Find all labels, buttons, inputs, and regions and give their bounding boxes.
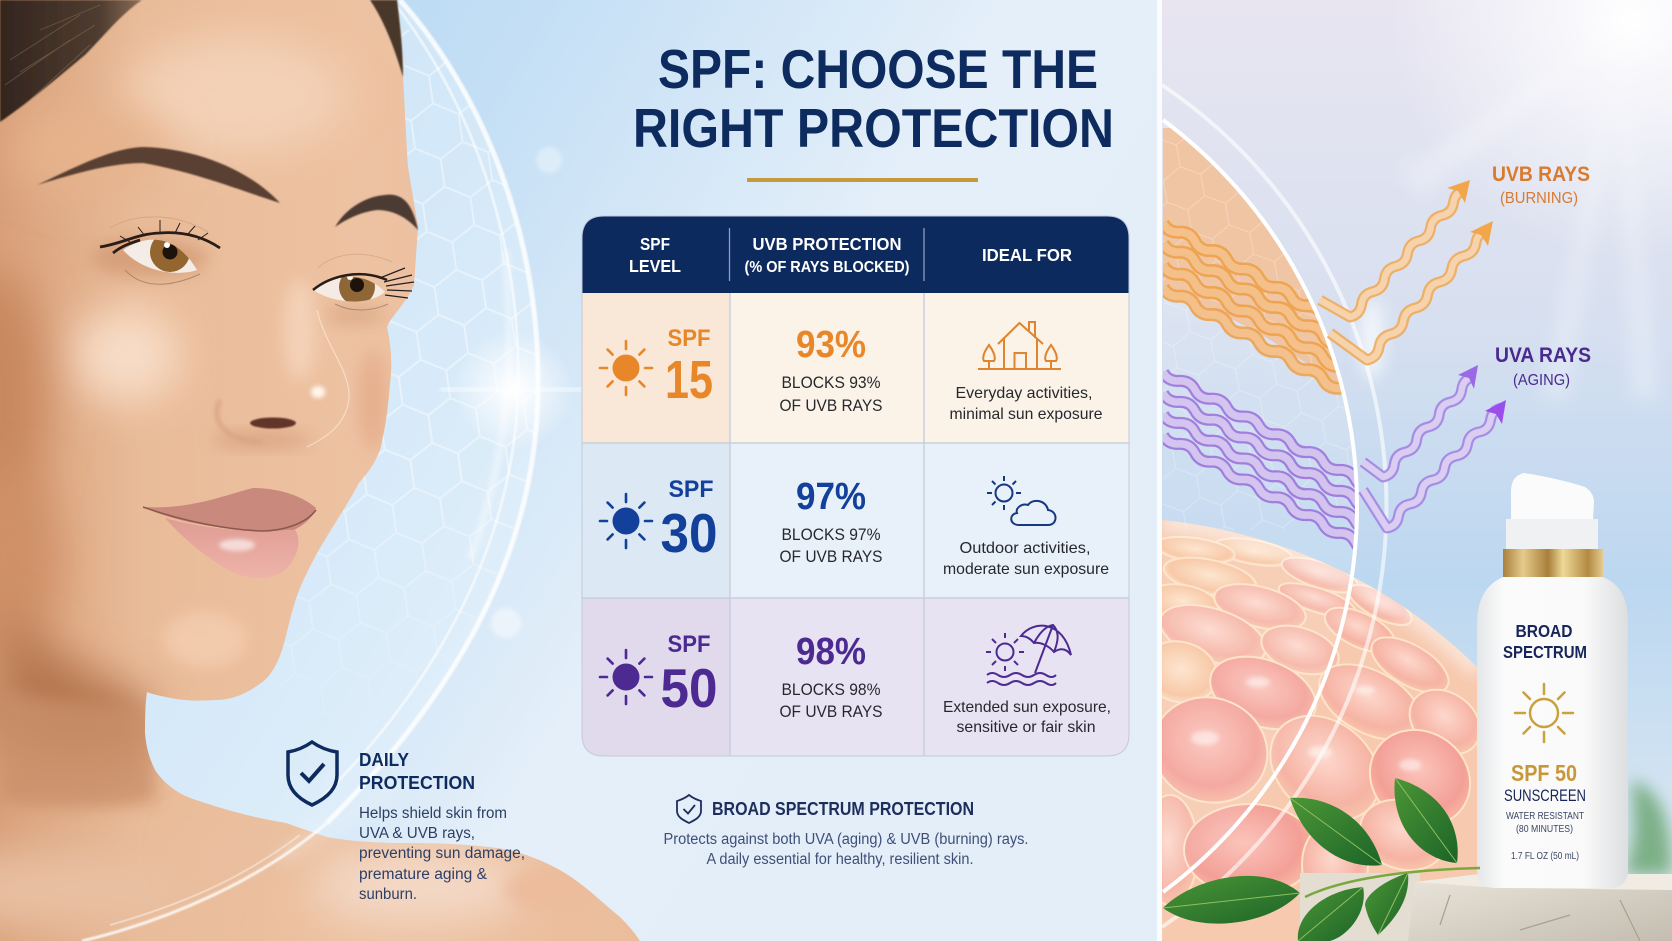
bottle label: water resistant: 1.7 FL OZ (50 mL) (1511, 850, 1579, 862)
icon: orange sun (600, 341, 652, 395)
text: blocks 97 percent: OF UVB RAYS (780, 547, 882, 566)
heading: broad spectrum protection: BROAD SPECTRUM PROTECTION (712, 799, 974, 819)
eyebrow left (37, 147, 280, 203)
sun glare (1440, 0, 1672, 395)
skin shading (0, 35, 595, 930)
eye right (313, 254, 414, 310)
bottle label: broad spectrum: BROAD (1516, 621, 1572, 641)
row: SPF 30 (600, 476, 1109, 578)
text: blocks 97 percent: BLOCKS 97% (782, 525, 880, 544)
table header: IDEAL FOR (982, 245, 1072, 265)
arrows: UVB rays reflected (1320, 180, 1493, 360)
eyebrow right (335, 195, 418, 230)
SPF 50 label: SPF (668, 631, 710, 658)
icon: beach umbrella, sun and waves (986, 625, 1071, 685)
heading: daily protection: PROTECTION (359, 772, 475, 793)
text: extended sun exposure: sensitive or fair skin (956, 719, 1096, 736)
SPF comparison table (582, 216, 1129, 756)
title (633, 38, 1114, 159)
row: SPF 50 (600, 625, 1111, 736)
panel: left and center background (0, 0, 1157, 941)
text: outdoor activities: Outdoor activities, (960, 540, 1090, 557)
label: UVA rays: (AGING) (1513, 372, 1570, 389)
text: extended sun exposure (943, 699, 1111, 736)
text: everyday activities: Everyday activities, (956, 385, 1092, 402)
table header: (% OF RAYS BLOCKED) (744, 259, 910, 276)
bottle neck (1506, 519, 1598, 549)
text: blocks 98 percent: BLOCKS 98% (782, 680, 880, 699)
UVB waves entering skin (1163, 220, 1342, 395)
SPF 30 label (660, 476, 718, 564)
marble pedestal (1300, 873, 1672, 941)
title: RIGHT PROTECTION (633, 97, 1114, 159)
bottle label: water resistant (1506, 810, 1584, 862)
text: blocks 98 percent: OF UVB RAYS (780, 702, 882, 721)
hair (0, 0, 403, 122)
footer: broad spectrum protection (664, 795, 1028, 868)
text: daily protection description: premature aging & (359, 866, 488, 883)
text: broad spectrum description: A daily essential for healthy, resilient skin. (706, 851, 974, 868)
bottle label: SPF 50: SPF 50 (1511, 760, 1577, 786)
table header (629, 234, 1072, 276)
bottle label: water resistant: WATER RESISTANT (1506, 810, 1584, 822)
panel: UV rays and sunscreen scene (1136, 0, 1672, 941)
text: extended sun exposure: Extended sun exposure, (943, 699, 1111, 716)
sunscreen bottle (1477, 473, 1628, 888)
label: UVB rays: UVB RAYS (1492, 163, 1590, 186)
icon: shield with check (288, 742, 337, 805)
label: UVB rays: (BURNING) (1500, 190, 1578, 207)
text: daily protection description: Helps shield skin from (359, 805, 507, 822)
text: everyday activities (950, 385, 1103, 423)
text: blocks 98 percent (780, 680, 882, 721)
nose modelling (284, 280, 316, 380)
bottle label: sunscreen: SUNSCREEN (1504, 787, 1586, 805)
UVA waves entering skin (1163, 372, 1371, 551)
table header: SPF (640, 234, 670, 254)
text: outdoor activities: moderate sun exposure (943, 561, 1109, 578)
shield arc over shoulder (81, 822, 330, 941)
arrows: UVA rays reflected (1363, 365, 1506, 528)
pump head (1511, 473, 1594, 519)
text: blocks 93 percent: BLOCKS 93% (782, 373, 880, 392)
SPF 30 label: SPF (668, 476, 714, 503)
table header: UVB PROTECTION (752, 234, 902, 254)
text: daily protection description: sunburn. (359, 886, 417, 903)
98 percent: 98% (796, 631, 866, 673)
SPF 15 label: 15 (665, 350, 713, 410)
heading: daily protection: DAILY (359, 749, 410, 770)
SPF 50 label (660, 631, 718, 719)
face and shoulders skin (0, 0, 640, 941)
blurred background leaves (1628, 774, 1672, 874)
SPF 30 label: 30 (660, 502, 718, 564)
green leaves (1163, 778, 1480, 941)
protective shield bubble (145, 0, 582, 824)
text: daily protection description: UVA & UVB rays, (359, 825, 475, 842)
SPF 50 label: 50 (660, 657, 718, 719)
row: SPF 15 (600, 322, 1103, 423)
93 percent: 93% (796, 324, 866, 366)
panel: woman's face with hexagon shield (0, 0, 640, 941)
nose (217, 310, 349, 447)
heading: daily protection (360, 753, 474, 789)
icon: purple sun (600, 650, 652, 704)
eye left (100, 217, 220, 284)
callout: daily protection (288, 742, 525, 903)
icon: bottle sun (1515, 684, 1573, 742)
bottle body (1477, 577, 1628, 888)
text: blocks 93 percent: OF UVB RAYS (780, 396, 882, 415)
text: daily protection description (359, 805, 525, 903)
label: UVB rays (1493, 166, 1590, 206)
title gold underline (747, 178, 978, 182)
text: broad spectrum description (664, 831, 1028, 868)
text: outdoor activities (943, 540, 1109, 578)
shield arcs (1162, 85, 1386, 927)
text: everyday activities: minimal sun exposure (950, 406, 1103, 423)
text: blocks 97 percent (780, 525, 882, 566)
bottle label: water resistant: (80 MINUTES) (1516, 823, 1573, 835)
label: UVA rays (1496, 348, 1590, 388)
text: daily protection description: preventing sun damage, (359, 845, 525, 862)
sky background (1162, 0, 1672, 941)
icon: house and trees (978, 322, 1061, 369)
skin layer inside shield arc (1162, 110, 1362, 892)
skin cells dome (1162, 520, 1478, 941)
text: broad spectrum description: Protects against both UVA (aging) & UVB (burning) rays. (664, 831, 1028, 848)
bottle label: broad spectrum (1504, 625, 1586, 658)
SPF 15 label: SPF (668, 325, 710, 352)
table header: LEVEL (629, 256, 681, 276)
title: SPF: CHOOSE THE (658, 38, 1098, 100)
decorative panel divider (1157, 0, 1162, 941)
icon: small shield with check (677, 795, 701, 823)
97 percent: 97% (796, 476, 866, 518)
icon: sun and cloud (987, 476, 1056, 525)
text: blocks 93 percent (780, 373, 882, 415)
gold collar (1503, 549, 1603, 577)
bottle label: broad spectrum: SPECTRUM (1503, 642, 1587, 662)
icon: blue sun (600, 494, 652, 548)
lips (143, 488, 316, 578)
SPF 15 label (665, 325, 713, 410)
label: UVA rays: UVA RAYS (1495, 344, 1591, 367)
